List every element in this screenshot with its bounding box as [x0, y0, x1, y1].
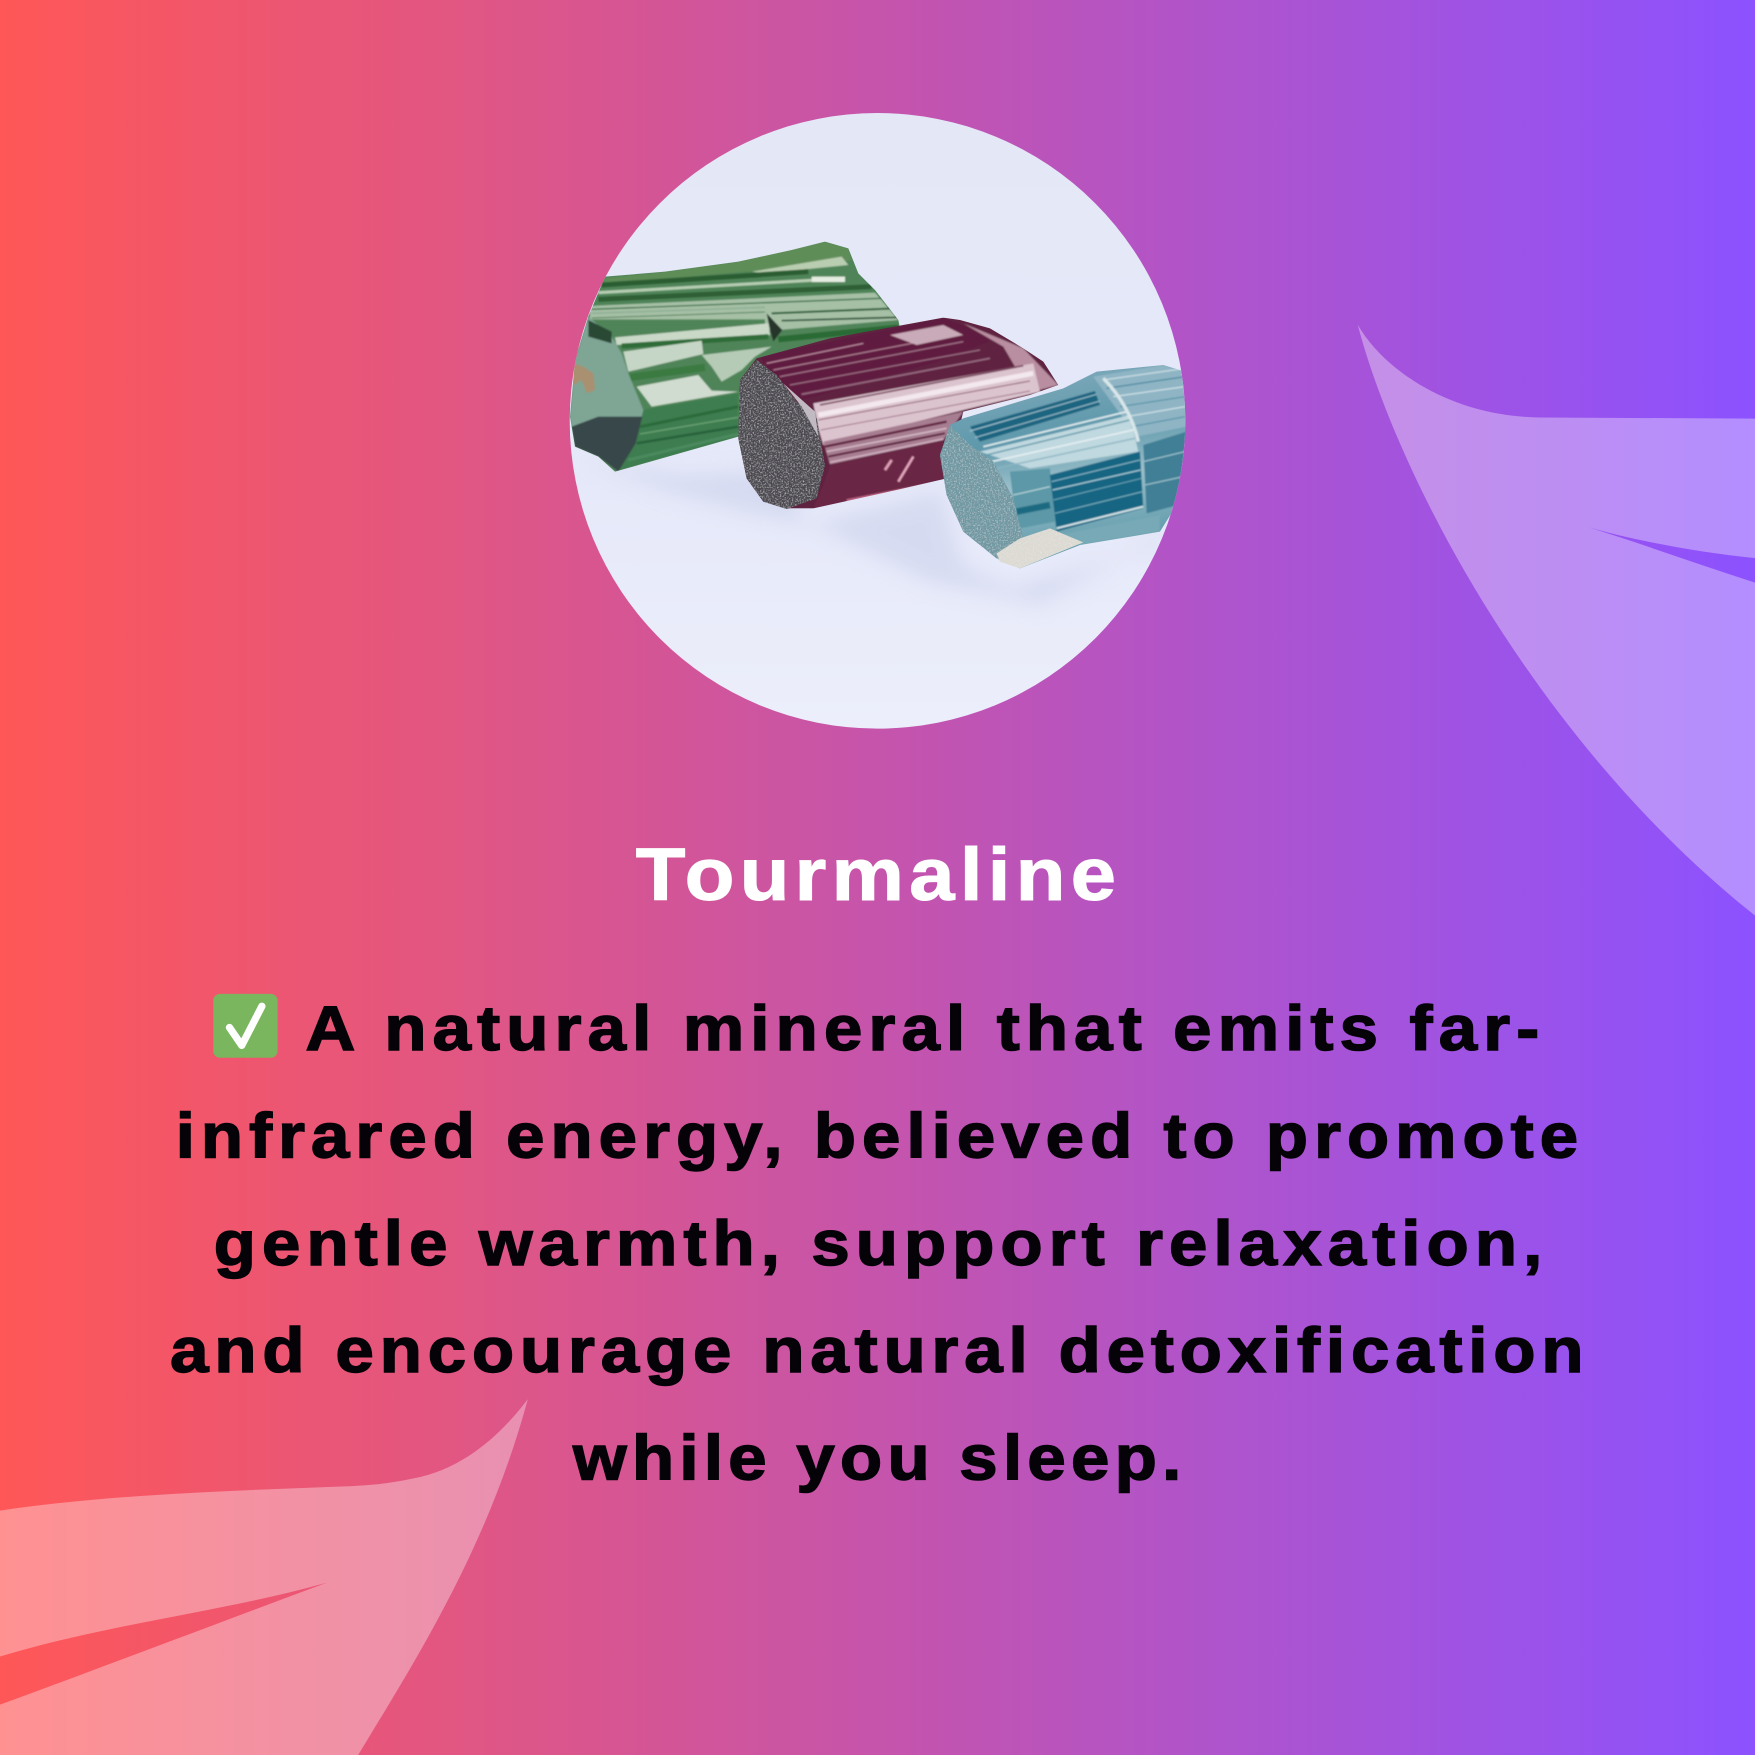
body line 2: infrared energy, believed to promote: [176, 1100, 1578, 1171]
top-right leaf decoration: [1358, 325, 1755, 916]
body line 5: while you sleep.: [572, 1423, 1181, 1493]
crystal shadows: [648, 472, 1081, 604]
title: Tourmaline: [636, 834, 1116, 916]
blue crystal: [937, 362, 1193, 572]
photo: tourmaline crystals in circle: [565, 107, 1193, 734]
blue crystal rough end: [940, 425, 1023, 568]
bottom-left leaf decoration: [0, 1399, 528, 1755]
body text block: [170, 993, 1584, 1493]
body line 3: gentle warmth, support relaxation,: [214, 1208, 1542, 1278]
purple crystal cut face: [738, 360, 825, 509]
icon: green check mark: [213, 994, 278, 1058]
green crystal: [565, 237, 902, 477]
body line 4: and encourage natural detoxification: [170, 1315, 1584, 1386]
blue crystal crust: [997, 528, 1083, 568]
body line 1: A natural mineral that emits far-: [306, 993, 1539, 1063]
purple crystal: [730, 312, 1063, 512]
